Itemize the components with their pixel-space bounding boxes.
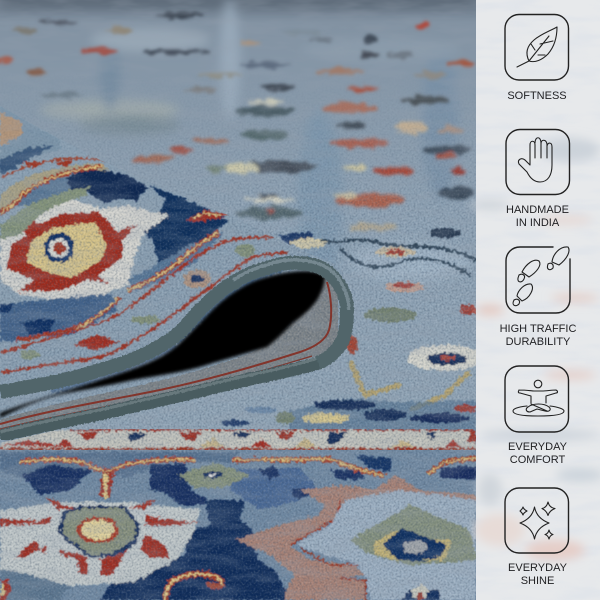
upper binding cord	[0, 260, 349, 392]
pale upper left	[0, 106, 62, 158]
feature: handmade in india: IN INDIA	[516, 217, 560, 229]
icon: hand	[506, 130, 570, 194]
feature: everyday shine	[505, 488, 568, 587]
fine weave texture	[0, 118, 476, 600]
rug border band	[0, 430, 476, 450]
navy ground shapes	[0, 452, 240, 480]
dark cavity under the roll	[0, 271, 325, 418]
ornaments	[186, 210, 230, 222]
right medallion	[350, 505, 476, 565]
feature: handmade in india	[506, 130, 570, 229]
band above gold line	[0, 163, 110, 212]
navy field	[66, 168, 148, 203]
pale medallion surround	[0, 502, 200, 586]
feature: high traffic durability: DURABILITY	[506, 336, 571, 348]
medallion body	[6, 212, 138, 292]
icon: meditating figure	[505, 366, 568, 432]
feature: everyday shine: SHINE	[521, 575, 554, 587]
label: high traffic durability: HIGH TRAFFIC	[500, 323, 576, 335]
gold scroll	[165, 574, 222, 600]
feature: softness	[505, 14, 568, 102]
white halo around medallion	[0, 200, 170, 300]
medallion	[58, 506, 140, 558]
icon: feather	[505, 14, 568, 80]
blue between gold line and leaf	[16, 172, 76, 206]
underside red stripes	[0, 282, 331, 424]
gold arcs	[20, 458, 476, 476]
lower binding cord	[0, 358, 322, 436]
pale field right	[295, 490, 476, 600]
feature: high traffic durability	[500, 247, 576, 348]
soft tonal mottling	[0, 0, 476, 600]
green leaf	[0, 186, 90, 240]
rolled corner of rug	[0, 100, 360, 450]
label: everyday comfort: EVERYDAY	[508, 441, 568, 453]
roll shadow and bindings	[0, 260, 349, 436]
label: softness: SOFTNESS	[507, 90, 567, 102]
lower blue medallion area	[0, 294, 118, 342]
icon: footprints	[506, 247, 570, 313]
label: handmade in india: HANDMADE	[506, 204, 569, 216]
rolled flap top face	[0, 107, 329, 443]
mid-right field motifs	[221, 228, 483, 430]
label: everyday shine: EVERYDAY	[508, 562, 568, 574]
red rays	[0, 497, 200, 576]
feature: everyday comfort: COMFORT	[510, 454, 565, 466]
translucent side panel	[470, 0, 600, 600]
icon: sparkles	[505, 488, 568, 553]
underside band	[0, 272, 338, 432]
rug field in background	[0, 0, 483, 452]
pink-brown arabesque	[235, 475, 476, 600]
green motif top	[178, 463, 250, 488]
gold and red border lines	[0, 166, 102, 213]
feature: everyday comfort	[505, 366, 568, 466]
front rug field	[0, 450, 476, 600]
